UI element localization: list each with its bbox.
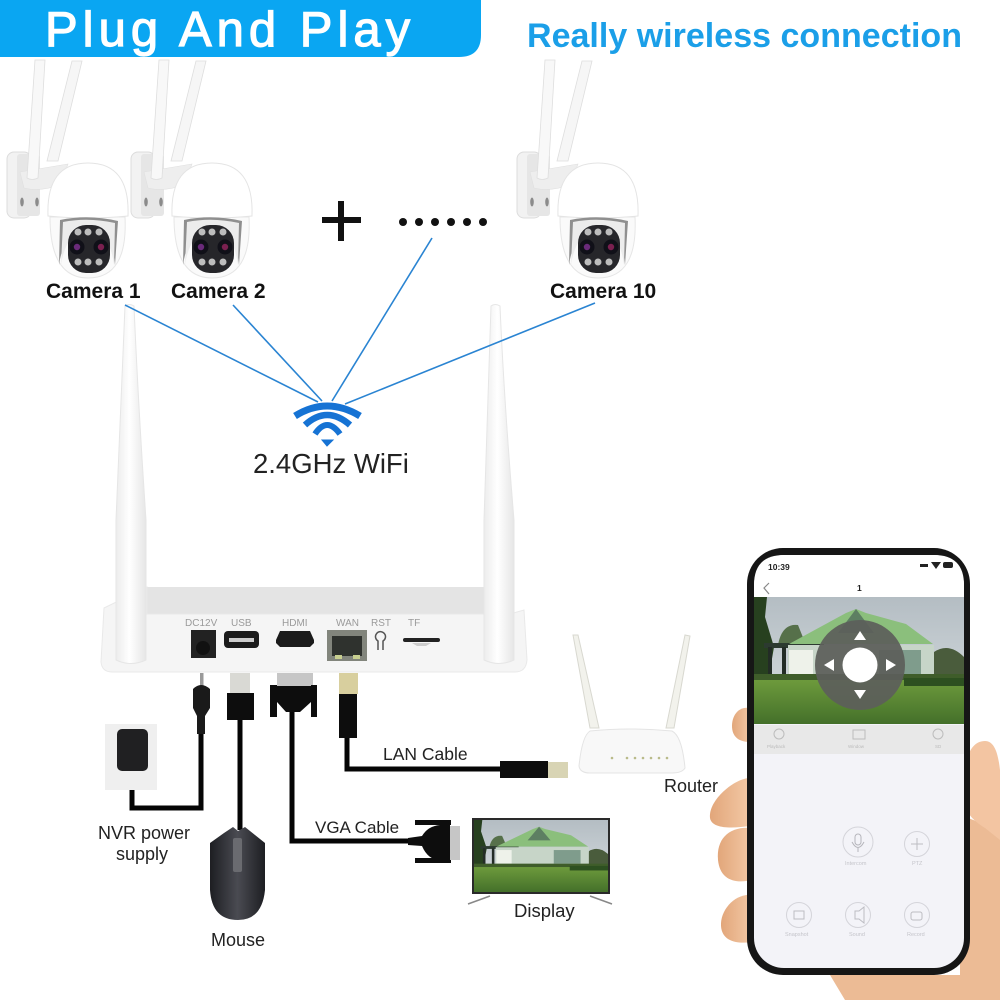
HDMI port <box>276 631 314 647</box>
VGA plug <box>270 673 317 717</box>
camera 1 <box>7 60 141 303</box>
mouse label: Mouse <box>211 930 265 950</box>
camera 10: Camera 10 <box>550 280 656 303</box>
port labels: RST <box>371 618 391 629</box>
live video <box>754 597 964 724</box>
PTZ joystick <box>815 620 905 710</box>
port labels: USB <box>231 618 252 629</box>
mouse <box>210 827 265 920</box>
USB port <box>224 631 259 648</box>
title banner: Plug And Play <box>45 3 415 57</box>
LAN plug <box>339 673 358 738</box>
DC port <box>191 630 216 658</box>
subtitle: Really wireless connection <box>527 17 962 55</box>
WAN port <box>327 630 367 661</box>
VGA connector <box>408 820 460 863</box>
camera 10 <box>517 60 656 303</box>
TF slot <box>403 638 440 646</box>
button labels: Intercom <box>845 861 867 867</box>
control buttons <box>786 827 930 928</box>
hand behind phone <box>710 708 1000 1000</box>
RST hole <box>376 632 386 650</box>
button labels: Sound <box>849 932 865 938</box>
status icons <box>920 562 953 569</box>
display <box>468 818 612 904</box>
channel number: 1 <box>857 583 862 593</box>
camera 2: Camera 2 <box>171 280 266 303</box>
port labels: WAN <box>336 618 359 629</box>
wifi label: 2.4GHz WiFi <box>253 448 409 479</box>
router <box>573 635 690 773</box>
NVR recorder <box>101 304 527 672</box>
power label <box>98 823 190 864</box>
toolbar: SD <box>935 744 942 749</box>
plus sign <box>322 201 361 241</box>
power adapter <box>105 724 157 790</box>
port labels <box>185 618 420 629</box>
LAN connector at router <box>500 761 568 778</box>
status bar time: 10:39 <box>768 562 790 572</box>
LAN label: LAN Cable <box>383 744 468 764</box>
wifi icon <box>295 406 360 446</box>
camera 1: Camera 1 <box>46 280 141 303</box>
toolbar <box>754 725 964 754</box>
smartphone <box>747 548 970 975</box>
router label: Router <box>664 776 718 796</box>
left antenna <box>116 304 146 664</box>
button labels <box>785 861 925 938</box>
port labels: HDMI <box>282 618 308 629</box>
button labels: Record <box>907 932 925 938</box>
cables <box>132 712 502 841</box>
display label: Display <box>514 900 575 921</box>
power label: supply <box>116 844 168 864</box>
button labels: PTZ <box>912 861 923 867</box>
button labels: Snapshot <box>785 932 809 938</box>
VGA label: VGA Cable <box>315 818 399 837</box>
back arrow <box>764 583 769 594</box>
blue connection lines <box>125 238 595 404</box>
port labels: DC12V <box>185 618 218 629</box>
DC plug <box>193 673 210 734</box>
power label: NVR power <box>98 823 190 843</box>
camera 2 <box>131 60 266 303</box>
toolbar: Playback <box>767 744 786 749</box>
more cameras dots <box>399 218 487 226</box>
right antenna <box>484 304 514 664</box>
toolbar: Window <box>848 744 865 749</box>
USB plug <box>227 673 254 720</box>
port labels: TF <box>408 618 420 629</box>
